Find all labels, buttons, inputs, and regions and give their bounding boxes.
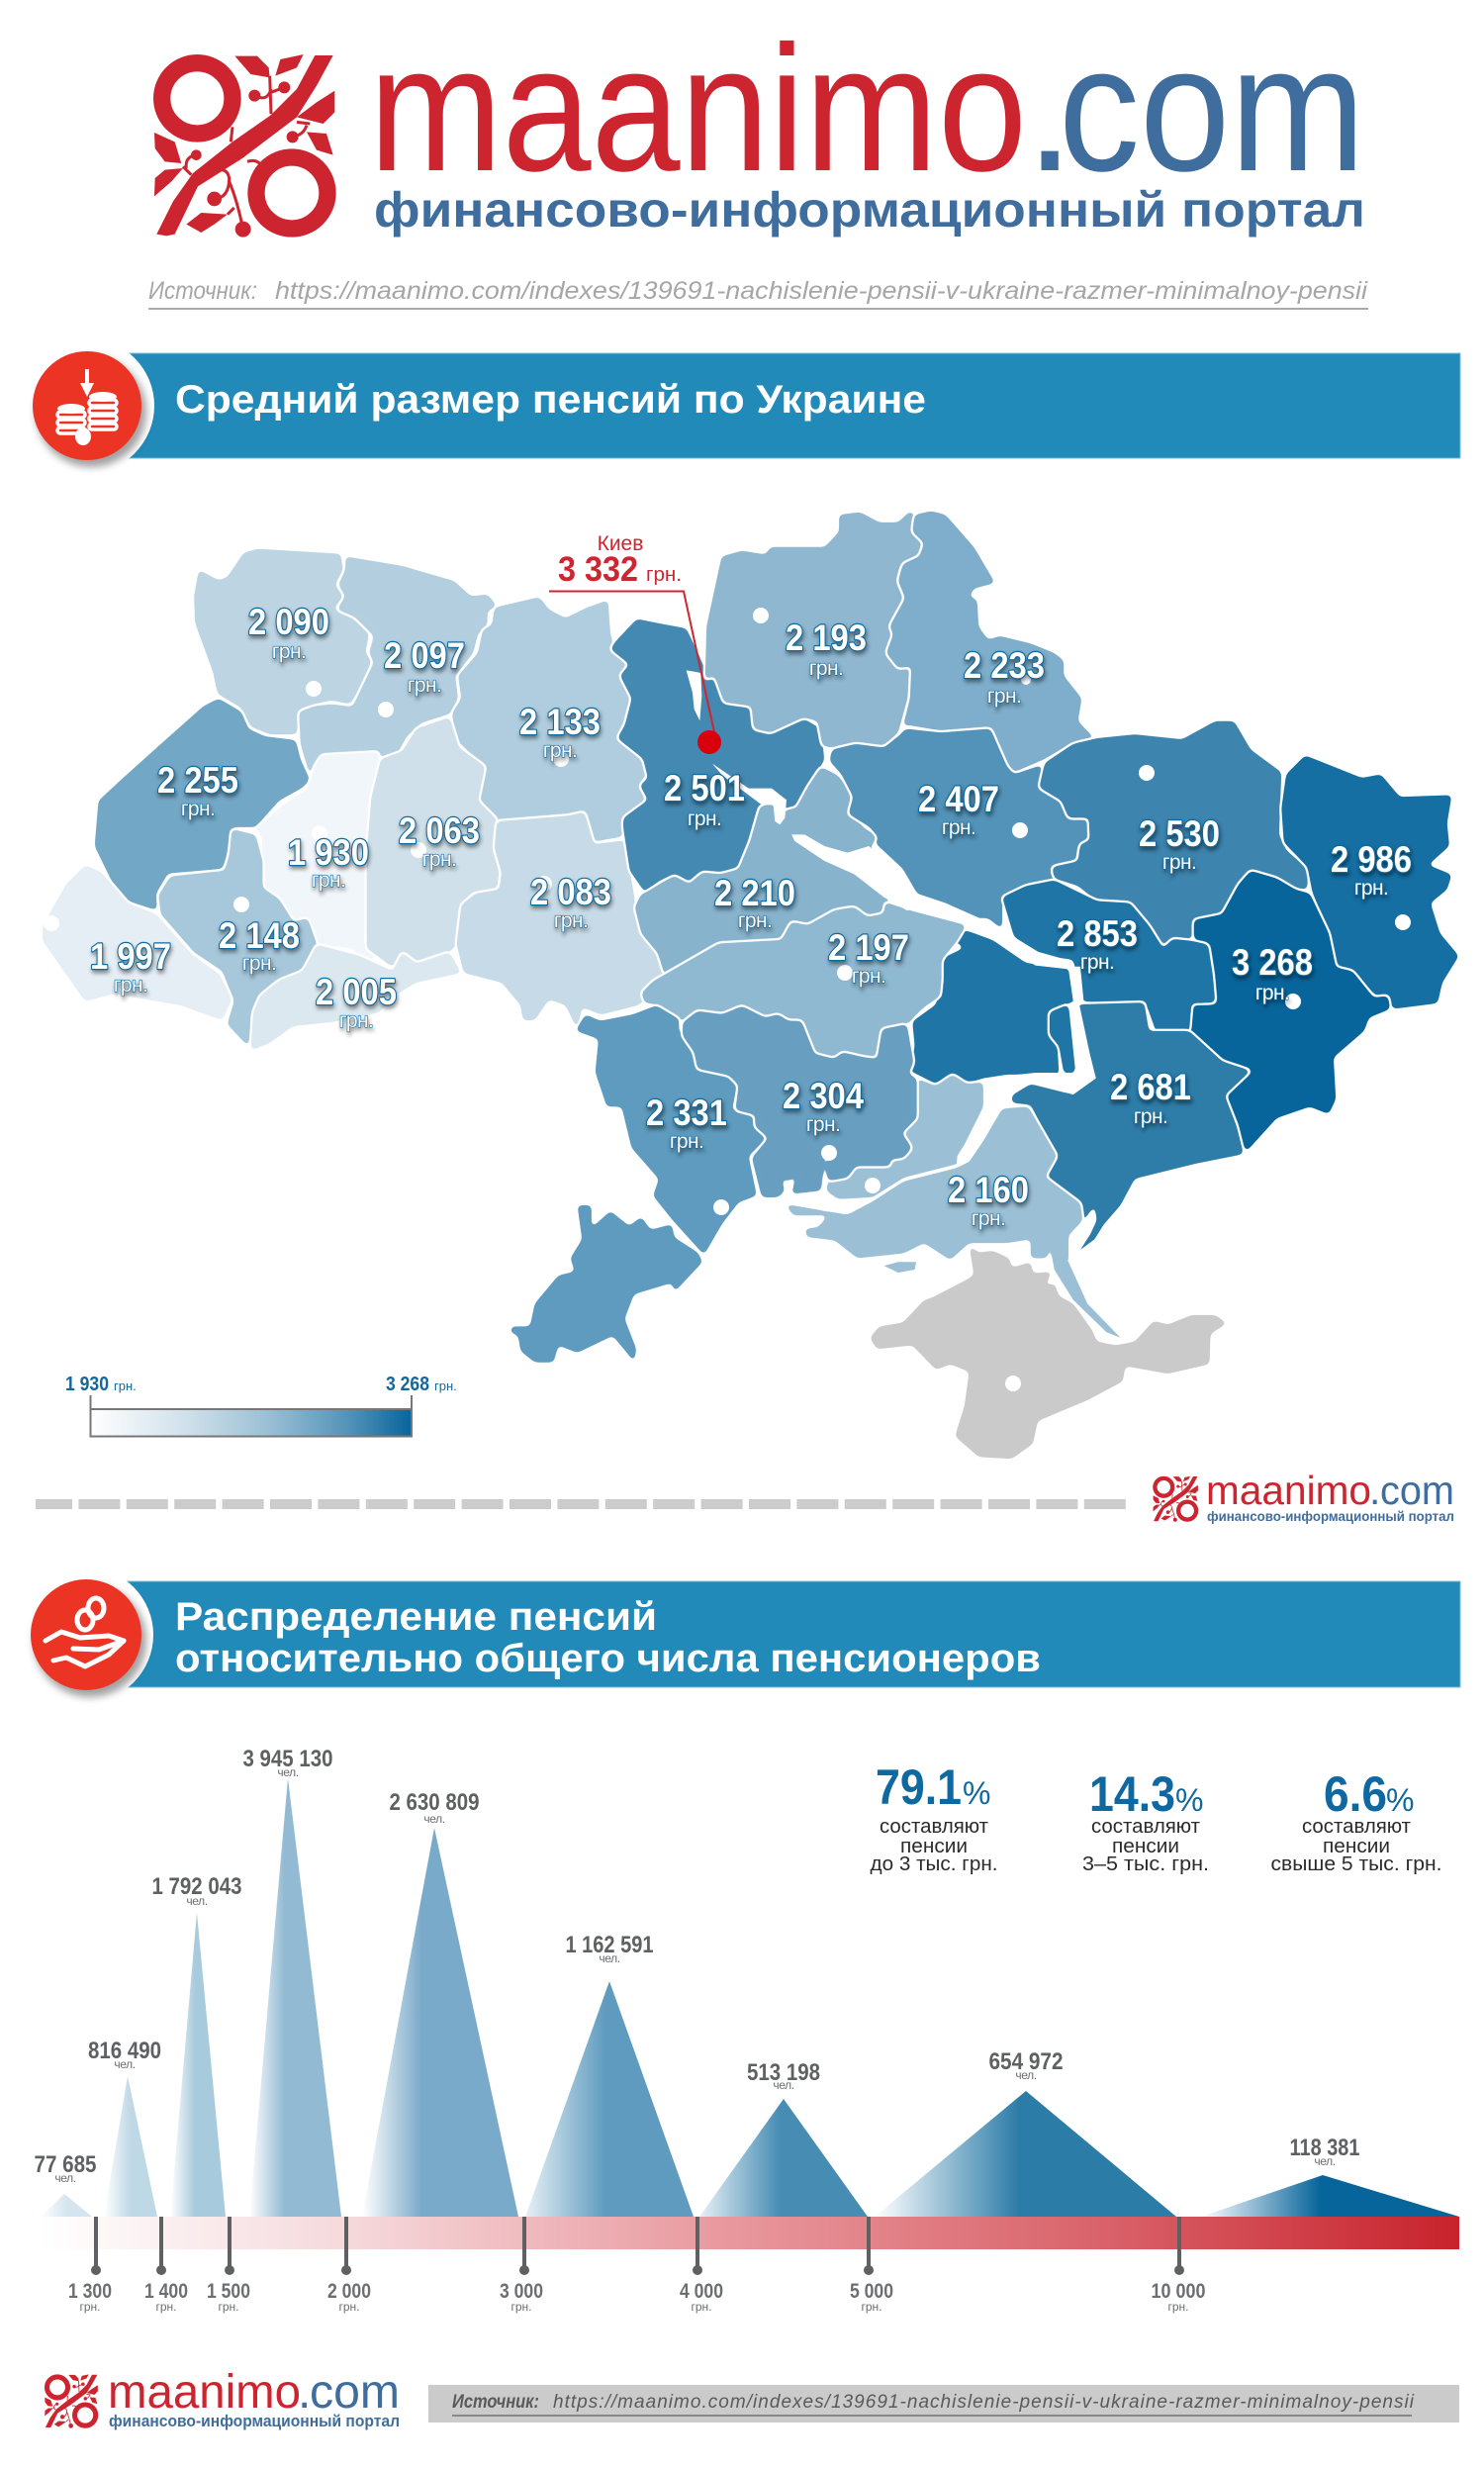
tick 3 000: грн. (510, 2300, 532, 2314)
percent stat: 79.1: до 3 тыс. грн. (871, 1853, 997, 1875)
region: Cherkasy (635, 767, 890, 975)
percent stat: 14.3: пенсии (1112, 1836, 1179, 1857)
region: Khmelnytskyi (367, 717, 500, 968)
bottom source bar: https://maanimo.com/indexes/139691-nachislenie-pensii-v-ukraine-razmer-minimalnoy-pensii (553, 2392, 1415, 2413)
triangle 77 685 (41, 2194, 92, 2217)
label: Khmelnytskyi (399, 810, 480, 871)
small logo top (1153, 1468, 1454, 1524)
count 118 381: 118 381 (1290, 2135, 1359, 2161)
region: Kherson island (883, 1262, 916, 1273)
label: Luhansk: 2 986 (1331, 839, 1412, 880)
Kyiv callout: 3 332 (558, 550, 638, 589)
label: Mykolaiv: 2 304 (783, 1076, 864, 1116)
percent stat: 6.6: пенсии (1323, 1836, 1390, 1857)
label: Chernivtsi (316, 972, 397, 1032)
label: Kyiv oblast: грн. (688, 808, 721, 830)
small wordmark dot: . (1369, 1468, 1380, 1513)
icon: red circle hand with coins (31, 1579, 141, 1690)
label: Zakarpattia (90, 936, 171, 997)
source line: https://maanimo.com/indexes/139691-nachislenie-pensii-v-ukraine-razmer-minimalnoy-pensii (275, 277, 1369, 305)
label: Ivano-Frankivsk (219, 915, 300, 975)
label: Kharkiv: 2 530 (1139, 813, 1220, 854)
axis ticks (68, 2217, 1205, 2314)
percent stat: 14.3: 14.3 (1089, 1766, 1175, 1822)
region: Rivne (299, 556, 497, 776)
label: Mykolaiv (783, 1076, 864, 1136)
label: Donetsk: грн. (1255, 982, 1289, 1004)
label: Kyiv oblast (664, 768, 745, 830)
legend: colour scale: грн. (434, 1378, 457, 1393)
triangle 513 198 (699, 2099, 868, 2217)
region: Mykolaiv (683, 1006, 917, 1197)
axis bar (41, 2217, 1459, 2249)
label: Vinnytsia (530, 872, 611, 932)
percent stat: 79.1: 79.1 (876, 1759, 962, 1815)
percent stat: 14.3 (1082, 1766, 1209, 1875)
tick 1 400: грн. (155, 2300, 177, 2314)
tick 1 400: 1 400 (144, 2280, 188, 2303)
count labels (34, 1746, 1359, 2185)
count 2 630 809: чел. (423, 1812, 445, 1826)
region: Poltava (829, 728, 1088, 929)
region: Chernivtsi (250, 945, 461, 1051)
tick 2 000: грн. (338, 2300, 360, 2314)
count 3 945 130 (243, 1746, 332, 1779)
percent stat: 6.6: 6.6 (1324, 1766, 1387, 1822)
region: Crimea (870, 1245, 1227, 1459)
tick 10 000: грн. (1167, 2300, 1189, 2314)
tick 2 000: 2 000 (327, 2280, 371, 2303)
label: Ternopil: грн. (312, 869, 345, 892)
label: Zakarpattia: 1 997 (90, 936, 171, 977)
tick 3 000 (500, 2280, 543, 2314)
small wordmark: maanimo (1206, 1468, 1371, 1513)
percent stat: 79.1 (871, 1759, 997, 1875)
legend: colour scale: грн. (114, 1378, 137, 1393)
tick 1 500: 1 500 (207, 2280, 250, 2303)
tick 1 300: 1 300 (68, 2280, 112, 2303)
triangle 2 630 809 (362, 1828, 518, 2217)
tick 4 000 (680, 2280, 723, 2314)
map value labels (90, 602, 1412, 1230)
label: Chernihiv (786, 618, 867, 680)
percent stat: 14.3: составляют (1091, 1816, 1200, 1838)
label: Kyiv oblast: 2 501 (664, 768, 745, 808)
tick 5 000: грн. (861, 2300, 882, 2314)
label: Volyn: 2 090 (248, 602, 329, 642)
region: Kherson north-west (826, 1075, 983, 1199)
count 1 792 043 (152, 1873, 241, 1908)
logo wordmark dot: . (1025, 9, 1074, 209)
region: Ternopil (255, 752, 379, 960)
label: Chernihiv: 2 193 (786, 618, 867, 658)
count 118 381: чел. (1314, 2154, 1336, 2168)
city dots (44, 608, 1411, 1391)
triangle 3 945 130 (249, 1778, 341, 2217)
label: Kherson (948, 1170, 1029, 1230)
region: Odesa north (576, 1005, 767, 1255)
count 2 630 809: 2 630 809 (390, 1789, 479, 1816)
small tagline: финансово-информационный портал (1207, 1508, 1454, 1524)
label: Dnipropetrovsk: 2 853 (1057, 913, 1138, 954)
tick 10 000 (1152, 2280, 1205, 2314)
label: Lviv (157, 760, 238, 820)
label: Vinnytsia: 2 083 (530, 872, 611, 912)
region: Luhansk (1281, 755, 1459, 1009)
map of Ukraine (43, 511, 1459, 1459)
label: Vinnytsia: грн. (554, 909, 588, 932)
label: Chernihiv: грн. (809, 657, 843, 680)
bottom wordmark: maanimo (108, 2366, 301, 2419)
count 1 162 591 (566, 1932, 653, 1965)
label: Sumy (964, 645, 1045, 708)
count 3 945 130: чел. (277, 1765, 299, 1779)
triangle 1 162 591 (525, 1981, 694, 2217)
bottom wordmark domain: com (310, 2366, 400, 2419)
percent stat: 6.6: свыше 5 тыс. грн. (1270, 1853, 1442, 1875)
region: Kherson (786, 1106, 1082, 1270)
label: Donetsk (1232, 942, 1313, 1004)
label: Rivne: грн. (408, 674, 441, 697)
label: Kherson: 2 160 (948, 1170, 1029, 1210)
icon: percent ornament small (1153, 1476, 1198, 1522)
label: Mykolaiv: грн. (806, 1113, 840, 1136)
label: Khmelnytskyi: 2 063 (399, 810, 480, 851)
percent stat: 6.6 (1270, 1766, 1442, 1875)
label: Rivne (384, 635, 465, 697)
label: Lviv: 2 255 (157, 760, 238, 801)
Kyiv callout: Киев (598, 532, 643, 555)
logo wordmark: maanimo (369, 9, 1027, 209)
label: Zaporizhzhia: грн. (1134, 1105, 1167, 1128)
label: Kirovohrad: грн. (852, 965, 885, 988)
label: Donetsk: 3 268 (1232, 942, 1313, 983)
region: Odesa south (510, 1205, 702, 1363)
bottom logo (45, 2366, 400, 2430)
count 654 972: 654 972 (989, 2048, 1063, 2075)
tick 1 500 (207, 2280, 250, 2314)
triangle chart (41, 1778, 1459, 2217)
heading: Средний размер пенсий по Украине (175, 378, 926, 422)
label: Sumy: грн. (987, 685, 1021, 708)
label: Zakarpattia: грн. (114, 974, 147, 997)
label: Zaporizhzhia: 2 681 (1110, 1067, 1191, 1107)
region: Sumy (886, 511, 1094, 772)
count 816 490: чел. (114, 2057, 136, 2071)
tick 1 400 (144, 2280, 188, 2314)
count 513 198: 513 198 (747, 2059, 820, 2086)
region: Lviv (95, 699, 310, 910)
label: Chernivtsi: грн. (339, 1009, 373, 1032)
bottom tagline: финансово-информационный портал (109, 2412, 400, 2430)
label: Poltava (918, 779, 999, 839)
label: Kharkiv (1139, 813, 1220, 874)
legend: colour scale: 3 268 (386, 1374, 429, 1395)
tick 4 000: грн. (691, 2300, 712, 2314)
label: Zhytomyr (519, 702, 601, 762)
label: Odesa: грн. (670, 1130, 703, 1153)
label: Kirovohrad (828, 927, 909, 988)
region: Kyiv oblast (610, 618, 824, 893)
count 513 198: чел. (773, 2078, 794, 2092)
label: Dnipropetrovsk (1057, 913, 1138, 974)
icon: percent ornament (154, 54, 334, 238)
label: Chernivtsi: 2 005 (316, 972, 397, 1012)
region: Chernihiv (705, 511, 922, 748)
tick 3 000: 3 000 (500, 2280, 543, 2303)
heading line 2: относительно общего числа пенсионеров (175, 1637, 1041, 1680)
label: Luhansk (1331, 839, 1412, 900)
label: Ivano-Frankivsk: грн. (242, 952, 276, 975)
panel: header distribution (19, 1568, 1460, 1702)
region: Kharkiv (1039, 721, 1308, 948)
icon: red circle with coins (33, 351, 141, 460)
river: Kyiv reservoir and Dnieper (687, 670, 1096, 1168)
triangle 1 792 043 (170, 1913, 226, 2217)
triangle 118 381 (1201, 2175, 1459, 2217)
count 77 685: чел. (54, 2171, 76, 2185)
count 1 792 043: 1 792 043 (152, 1873, 241, 1900)
tick 10 000: 10 000 (1152, 2280, 1205, 2303)
label: Lviv: грн. (181, 798, 215, 820)
label: Kirovohrad: 2 197 (828, 927, 909, 968)
label: Ivano-Frankivsk: 2 148 (219, 915, 300, 956)
label: Kharkiv: грн. (1162, 851, 1196, 874)
icon: percent ornament bottom (45, 2374, 98, 2428)
count 1 162 591: 1 162 591 (566, 1932, 653, 1958)
label: Cherkasy: 2 210 (714, 873, 795, 913)
percent stat: 6.6: % (1386, 1782, 1414, 1818)
label: Khmelnytskyi: грн. (422, 848, 456, 871)
label: Ternopil: 1 930 (288, 832, 369, 873)
logo wordmark domain: com (1059, 9, 1365, 209)
label: Luhansk: грн. (1354, 877, 1388, 900)
region: Ivano-Frankivsk (158, 829, 317, 1047)
panel: header average pension (20, 338, 1460, 473)
label: Zhytomyr: 2 133 (519, 702, 601, 742)
label: Sumy: 2 233 (964, 645, 1045, 686)
tick 4 000: 4 000 (680, 2280, 723, 2303)
label: Poltava: грн. (942, 816, 975, 839)
label: Rivne: 2 097 (384, 635, 465, 676)
count 77 685: 77 685 (34, 2151, 97, 2178)
tick 2 000 (327, 2280, 371, 2314)
bottom wordmark dot: . (298, 2366, 311, 2419)
region: Volyn (194, 549, 371, 734)
region: Zhytomyr (452, 597, 648, 841)
heading line 1: Распределение пенсий (175, 1595, 657, 1639)
label: Volyn (248, 602, 329, 663)
label: Ternopil (288, 832, 369, 892)
small wordmark domain: com (1380, 1468, 1454, 1513)
count 816 490 (88, 2038, 161, 2071)
percent stat: 79.1: пенсии (900, 1836, 968, 1857)
count 3 945 130: 3 945 130 (243, 1746, 332, 1772)
label: Zhytomyr: грн. (543, 739, 577, 762)
logo tagline: финансово-информационный портал (374, 182, 1365, 238)
tick 1 300 (68, 2280, 112, 2314)
bottom source bar (428, 2385, 1459, 2422)
tick 1 300: грн. (79, 2300, 101, 2314)
legend: colour scale (65, 1374, 457, 1437)
Kyiv callout (549, 532, 721, 754)
main logo (154, 9, 1365, 238)
percent stat: 79.1: составляют (880, 1816, 988, 1838)
region: Vinnytsia (457, 812, 665, 1030)
count 2 630 809 (390, 1789, 479, 1826)
region: Zakarpattia (43, 865, 232, 1020)
tick 5 000 (850, 2280, 893, 2314)
count 1 162 591: чел. (599, 1951, 620, 1965)
region: Zaporizhzhia tail (1080, 1205, 1116, 1250)
label: Odesa: 2 331 (646, 1092, 727, 1133)
percent stat: 79.1: % (963, 1775, 990, 1811)
region: Dnipropetrovsk strip (1050, 1004, 1075, 1074)
count 816 490: 816 490 (88, 2038, 161, 2064)
label: Dnipropetrovsk: грн. (1080, 951, 1114, 974)
tick 5 000: 5 000 (850, 2280, 893, 2303)
label: Odesa (646, 1092, 727, 1153)
bottom source bar: Источник: (452, 2392, 539, 2413)
legend: colour scale: 1 930 (65, 1374, 109, 1395)
region: Dnipropetrovsk north (1002, 880, 1215, 1032)
percent stat: 14.3: % (1175, 1782, 1203, 1818)
percent stat: 14.3: 3–5 тыс. грн. (1082, 1853, 1209, 1875)
region: Kirovohrad (641, 902, 967, 1059)
label: Zaporizhzhia (1110, 1067, 1191, 1128)
triangle 654 972 (875, 2091, 1176, 2217)
label: Volyn: грн. (272, 640, 306, 663)
source line: Источник: (148, 277, 257, 305)
tick 1 500: грн. (218, 2300, 239, 2314)
triangle 816 490 (104, 2076, 157, 2217)
label: Kherson: грн. (972, 1207, 1005, 1230)
region: Zaporizhzhia (1012, 1002, 1251, 1249)
label: Cherkasy (714, 873, 795, 932)
percent stat: 6.6: составляют (1302, 1816, 1411, 1838)
count 654 972: чел. (1015, 2068, 1037, 2082)
Kyiv callout: грн. (646, 564, 682, 586)
region: Dnipropetrovsk south (910, 930, 1075, 1084)
region: Donetsk (1189, 871, 1390, 1152)
label: Cherkasy: грн. (738, 909, 772, 932)
region: Arabat spit (1050, 1241, 1121, 1338)
label: Poltava: 2 407 (918, 779, 999, 819)
count 118 381 (1290, 2135, 1359, 2168)
count 1 792 043: чел. (186, 1894, 208, 1908)
dashed divider (36, 1499, 1126, 1509)
